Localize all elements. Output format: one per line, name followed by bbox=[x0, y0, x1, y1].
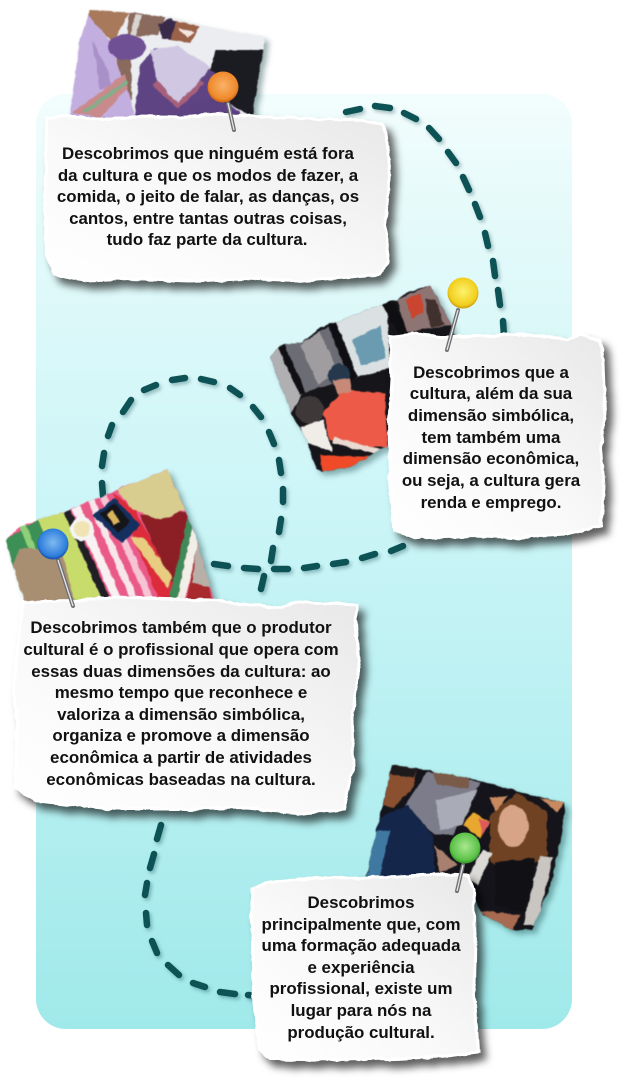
card 1 text: cantos, entre tantas outras coisas, bbox=[69, 209, 347, 228]
card 1 text: comida, o jeito de falar, as danças, os bbox=[57, 187, 359, 206]
card 3 text: valoriza a dimensão simbólica, bbox=[57, 705, 305, 724]
card 2 text: renda e emprego. bbox=[421, 493, 561, 512]
card 4 text: principalmente que, com bbox=[262, 915, 460, 934]
card 2 text: ou seja, a cultura gera bbox=[402, 471, 581, 490]
icon: blue pin bbox=[38, 528, 73, 606]
card 3 text: Descobrimos também que o produtor bbox=[30, 618, 332, 637]
card 3 text: mesmo tempo que reconhece e bbox=[55, 683, 307, 702]
photo: colourful textile and crafts bbox=[5, 468, 220, 602]
card 4 text: produção cultural. bbox=[287, 1023, 435, 1042]
icon: green pin bbox=[450, 832, 480, 891]
card 2 text: Descobrimos que a bbox=[413, 363, 570, 382]
card 4 text bbox=[262, 893, 461, 1042]
card 1 text: Descobrimos que ninguém está fora bbox=[62, 144, 355, 163]
card 4 text: e experiência bbox=[307, 958, 415, 977]
card 2 text: dimensão econômica, bbox=[403, 449, 579, 468]
card 3 text bbox=[23, 618, 339, 789]
card 1 text bbox=[57, 144, 359, 249]
photo: dancer in purple dress bbox=[60, 5, 270, 120]
photo: couple viewing art bbox=[270, 284, 460, 479]
card 2 text: dimensão simbólica, bbox=[408, 406, 574, 425]
photo: people in discussion bbox=[360, 760, 570, 935]
card 4 text: Descobrimos bbox=[307, 893, 415, 912]
card 4 text: profissional, existe um bbox=[269, 979, 453, 998]
card 2 text: tem também uma bbox=[422, 428, 561, 447]
icon: yellow pin bbox=[447, 278, 478, 350]
card 2 text: cultura, além da sua bbox=[410, 384, 573, 403]
card 1 text: da cultura e que os modos de fazer, a bbox=[58, 166, 359, 185]
teal background panel bbox=[36, 94, 572, 1029]
card 4 text: lugar para nós na bbox=[291, 1001, 432, 1020]
card 2: economic dimension bbox=[389, 334, 605, 538]
card 4: a place in cultural production bbox=[252, 874, 478, 1060]
card 3 text: essas duas dimensões da cultura: ao bbox=[31, 662, 331, 681]
card 3: cultural producer bbox=[13, 597, 359, 814]
card 1 text: tudo faz parte da cultura. bbox=[107, 230, 307, 249]
card 4 text: uma formação adequada bbox=[262, 936, 461, 955]
card 3 text: cultural é o profissional que opera com bbox=[23, 640, 339, 659]
card 2 text bbox=[402, 363, 581, 512]
card 3 text: econômica a partir de atividades bbox=[50, 748, 312, 767]
dashed connector paths bbox=[102, 106, 504, 996]
card 3 text: organiza e promove a dimensão bbox=[52, 726, 310, 745]
card 3 text: econômicas baseadas na cultura. bbox=[46, 770, 316, 789]
card 1: nobody is outside culture bbox=[45, 114, 389, 281]
icon: orange pin bbox=[208, 72, 238, 130]
